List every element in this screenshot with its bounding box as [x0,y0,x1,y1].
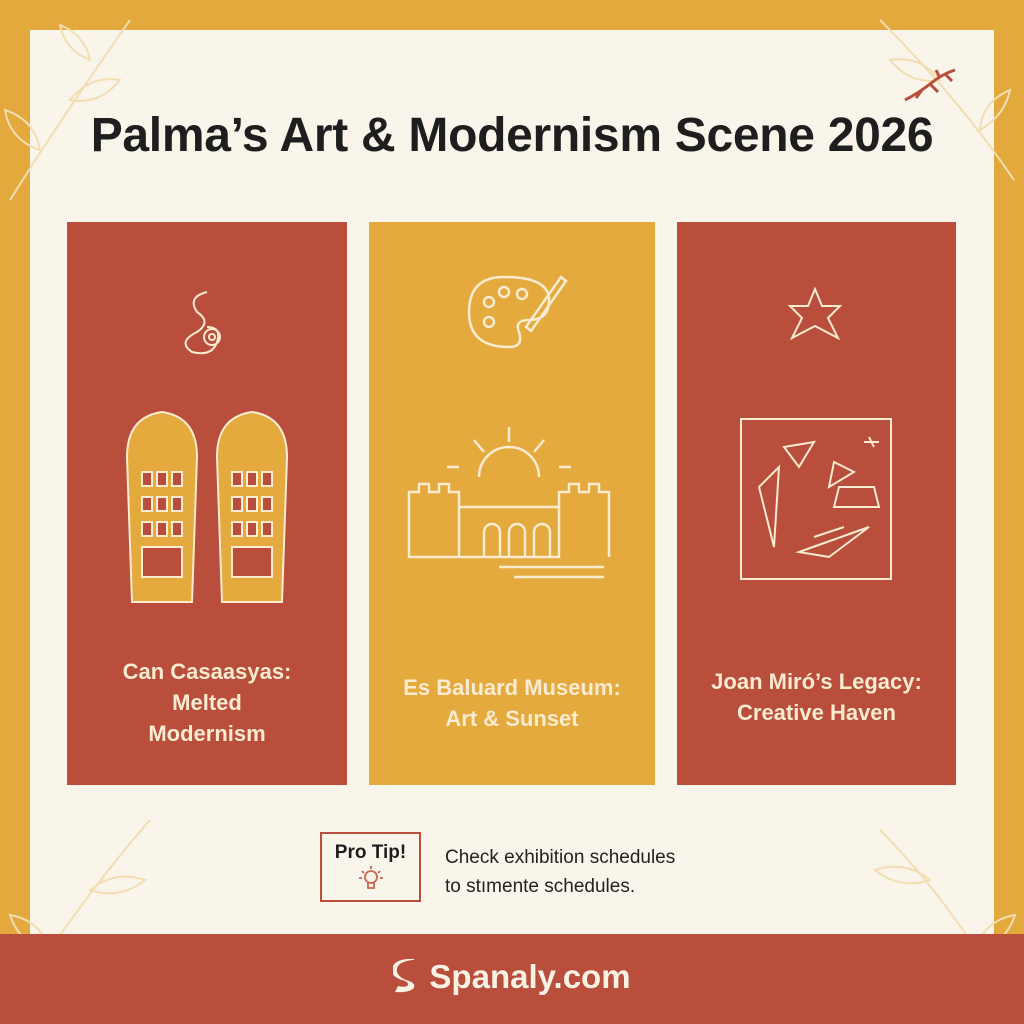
callout: pro tip box [320,832,421,902]
footer logo and text: Spanaly.com [429,958,631,995]
callout: pro tip box: Pro Tip! [335,842,406,863]
icon: palette [468,275,568,348]
panel text: Can Casaasyas: [123,659,291,684]
icon: swirl [184,291,221,354]
panel text: Modernism [148,721,266,746]
text block: tip: Check exhibition schedules [445,847,675,868]
icon: star [788,287,842,340]
icon: fortress and sun [408,427,610,578]
panel text: Art & Sunset [445,706,579,731]
icon: abstract art frame [740,418,892,580]
panel text [711,669,922,725]
panel text: Melted [172,690,242,715]
panel text: Joan Miró’s Legacy: [711,669,922,694]
panel text: Es Baluard Museum: [403,675,621,700]
panel text: Creative Haven [737,700,896,725]
panel text [123,659,291,746]
panel: Es Baluard [369,222,655,785]
footer band [0,934,1024,1024]
panel text [403,675,621,731]
icon: gecko [904,68,956,102]
panel: Can Casaasyas [67,222,347,785]
text block: tip: to stımente schedules. [445,876,635,897]
panel: Joan Miró [677,222,956,785]
text block: tip [445,847,675,897]
title: Palma’s Art & Modernism Scene 2026 [91,109,933,162]
icon: twin buildings [126,411,288,603]
icon: lightbulb [359,866,383,889]
